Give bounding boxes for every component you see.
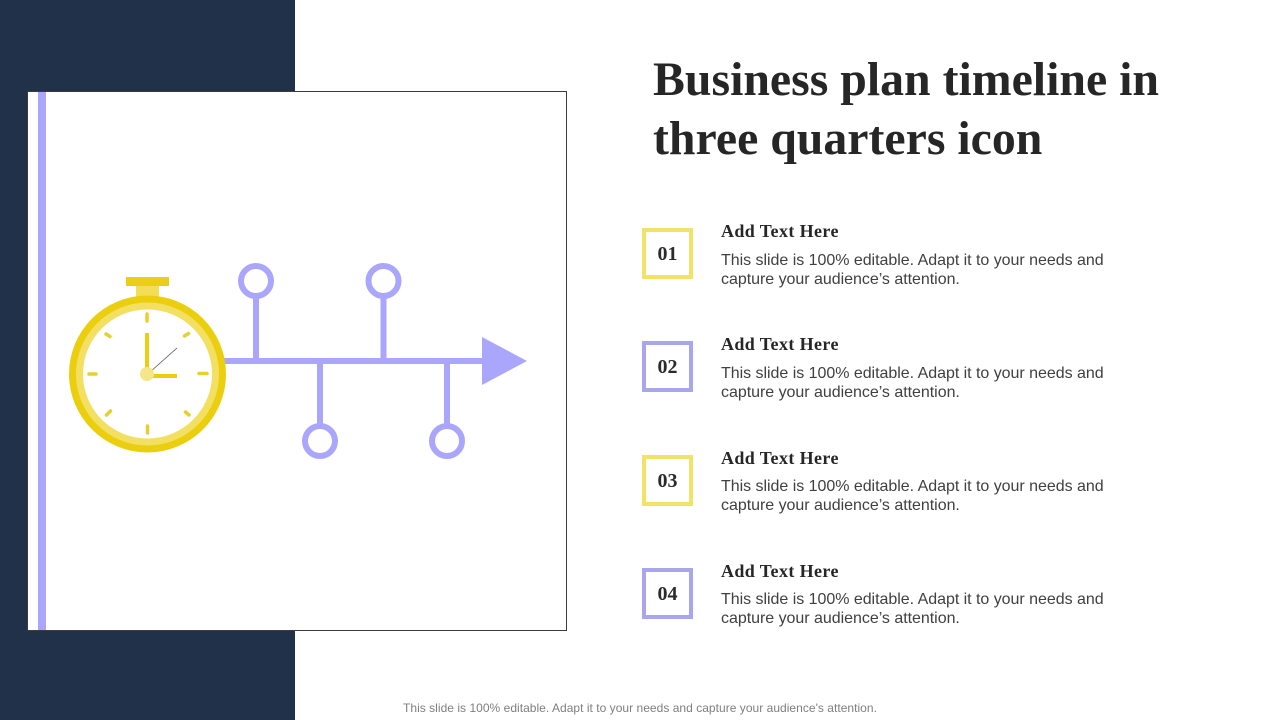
item 03 [642, 448, 1104, 514]
number box 02 [642, 341, 693, 392]
item heading 02: Add Text Here [721, 334, 839, 354]
item 01 [642, 221, 1104, 288]
item text 01 [721, 252, 1104, 288]
item heading 03: Add Text Here [721, 448, 839, 468]
item heading 04: Add Text Here [721, 561, 839, 581]
number box 04 [642, 568, 693, 619]
item heading 01: Add Text Here [721, 221, 839, 241]
item text 02: This slide is 100% editable. Adapt it to your needs and [721, 365, 1104, 382]
item text 03: capture your audience’s attention. [721, 497, 960, 514]
footer note: This slide is 100% editable. Adapt it to your needs and capture your audience's attention. [403, 701, 877, 715]
item text 04 [721, 591, 1104, 627]
item text 02: capture your audience’s attention. [721, 384, 960, 401]
title: Business plan timeline in [653, 53, 1159, 106]
milestone 1 (top) [241, 266, 271, 360]
number box 01 [642, 228, 693, 279]
number box 03: 03 [658, 470, 678, 492]
dark navy side band [0, 0, 295, 720]
icon: stopwatch [69, 277, 226, 452]
number box 02: 02 [658, 356, 678, 378]
item text 04: capture your audience’s attention. [721, 610, 960, 627]
item 04 [642, 561, 1104, 627]
item text 01: This slide is 100% editable. Adapt it to your needs and [721, 252, 1104, 269]
item text 02 [721, 365, 1104, 401]
number box 03 [642, 455, 693, 506]
title [653, 53, 1159, 165]
item text 04: This slide is 100% editable. Adapt it to your needs and [721, 591, 1104, 608]
timeline arrow [222, 337, 527, 385]
item text 03 [721, 478, 1104, 514]
item 02 [642, 334, 1104, 401]
milestone 2 (top) [368, 266, 398, 360]
panel accent stripe [38, 92, 46, 630]
milestone 4 (bottom) [432, 362, 462, 456]
illustration panel [27, 91, 567, 631]
number box 04: 04 [658, 583, 678, 605]
title: three quarters icon [653, 112, 1042, 165]
item text 01: capture your audience’s attention. [721, 271, 960, 288]
milestone 3 (bottom) [305, 362, 335, 456]
item text 03: This slide is 100% editable. Adapt it to your needs and [721, 478, 1104, 495]
number box 01: 01 [658, 243, 678, 265]
